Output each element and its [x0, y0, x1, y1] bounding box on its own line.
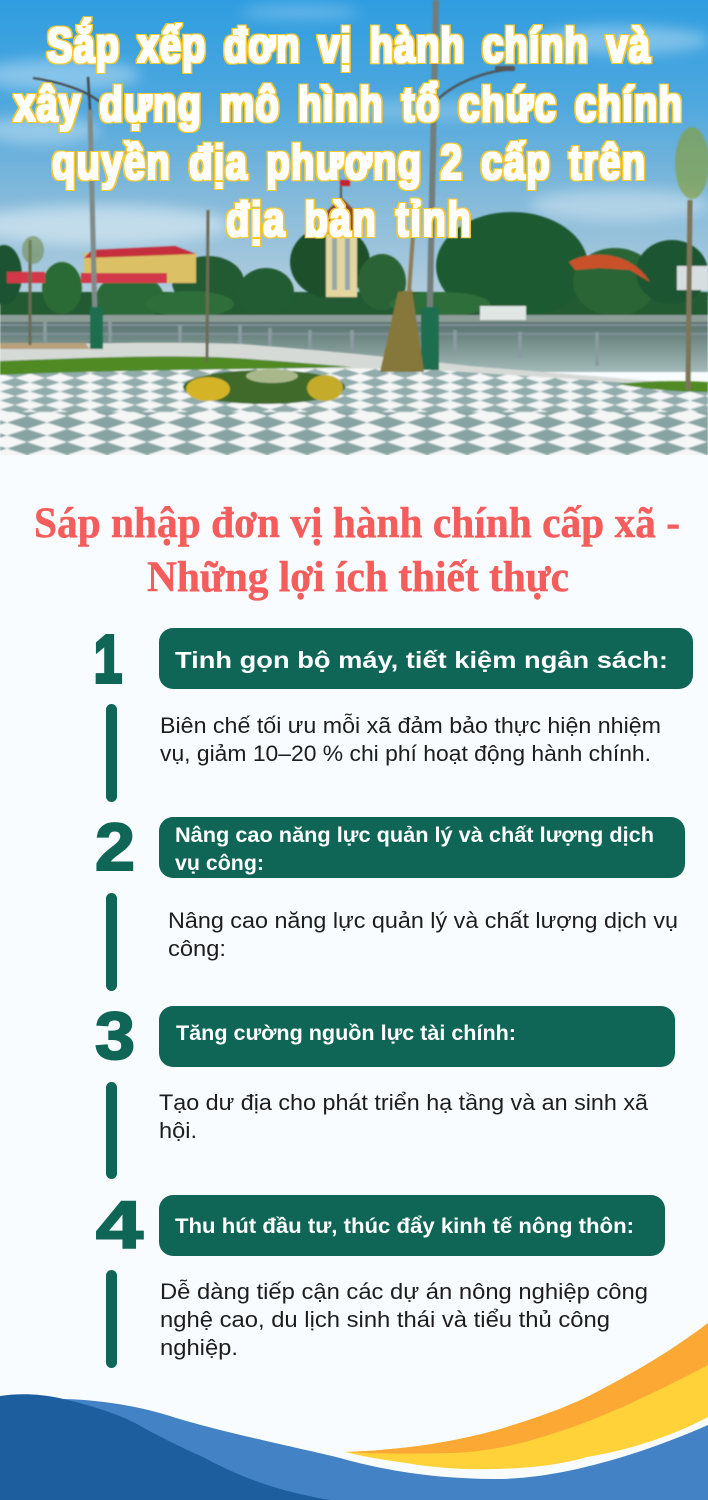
number 1: 1 [94, 622, 122, 697]
trees back row [0, 290, 708, 316]
paving [0, 369, 708, 412]
item 2 vertical bar [106, 893, 117, 991]
item 3 body text [159, 1090, 649, 1143]
item 1 body text: Biên chế tối ưu mỗi xã đảm bảo thực hiện nhiệm [160, 713, 661, 738]
number 3: 3 [95, 999, 135, 1074]
bottom wave decoration [0, 1323, 708, 1500]
building left [84, 253, 196, 283]
item 4 body text: nghệ cao, du lịch sinh thái và tiểu thủ công [160, 1307, 610, 1332]
photo title: xây dựng mô hình tổ chức chính [14, 78, 682, 132]
bank [0, 315, 708, 322]
photo title [14, 17, 682, 247]
photo title: địa bàn tỉnh [226, 193, 471, 247]
item 4 vertical bar [106, 1270, 117, 1368]
flower bed [183, 370, 345, 404]
item 1: streamline apparatus [94, 622, 693, 802]
item 1 vertical bar [106, 704, 117, 802]
section heading: Những lợi ích thiết thực [147, 554, 569, 601]
number 2: 2 [95, 810, 135, 885]
item 2 body text [168, 908, 678, 961]
photo title: Sắp xếp đơn vị hành chính và [47, 17, 650, 73]
item 3 body text: Tạo dư địa cho phát triển hạ tầng và an sinh xã [159, 1090, 649, 1115]
item 2 body text: công: [168, 936, 226, 961]
tower [326, 233, 357, 297]
walkway [0, 342, 658, 384]
section heading: Sáp nhập đơn vị hành chính cấp xã - [34, 500, 680, 547]
item 2 header bar: vụ công: [175, 852, 264, 875]
item 4: attract investment [96, 1188, 665, 1368]
item 2: management capacity [95, 810, 685, 991]
item 2 header bar: Nâng cao năng lực quản lý và chất lượng dịch [175, 824, 654, 847]
section heading [34, 500, 680, 601]
railing [0, 325, 708, 334]
item 4 body text: Dễ dàng tiếp cận các dự án nông nghiệp công [160, 1279, 648, 1304]
item 4 body text [160, 1279, 648, 1360]
item 2 header bar [159, 817, 685, 878]
grass [0, 356, 352, 375]
photo title: quyền địa phương 2 cấp trên [52, 136, 645, 190]
item 1 body text [160, 713, 661, 766]
item 1 body text: vụ, giảm 10–20 % chi phí hoạt động hành chính. [160, 741, 651, 766]
item 4 header bar: Thu hút đầu tư, thúc đẩy kinh tế nông thôn: [175, 1215, 634, 1238]
item 4 header bar [159, 1195, 665, 1256]
lamp poles [429, 0, 436, 350]
flame trees [569, 255, 650, 282]
wrapped tree [380, 290, 424, 372]
item 4 body text: nghiệp. [160, 1335, 238, 1360]
water [0, 322, 708, 372]
building right [677, 266, 708, 290]
item 1 header bar [159, 628, 693, 689]
item 3 vertical bar [106, 1082, 117, 1179]
number 4: 4 [96, 1188, 143, 1263]
thin saplings [30, 210, 208, 362]
foreground trees [158, 291, 234, 315]
sand strip [0, 343, 90, 349]
item 3 header bar [159, 1006, 675, 1067]
item 3 header bar: Tăng cường nguồn lực tài chính: [176, 1022, 516, 1045]
item 3: financial resources [95, 999, 675, 1179]
item 1 header bar: Tinh gọn bộ máy, tiết kiệm ngân sách: [175, 647, 668, 673]
photo: riverside park with tower [0, 0, 708, 460]
item 2 body text: Nâng cao năng lực quản lý và chất lượng dịch vụ [168, 908, 678, 933]
item 3 body text: hội. [159, 1118, 197, 1143]
